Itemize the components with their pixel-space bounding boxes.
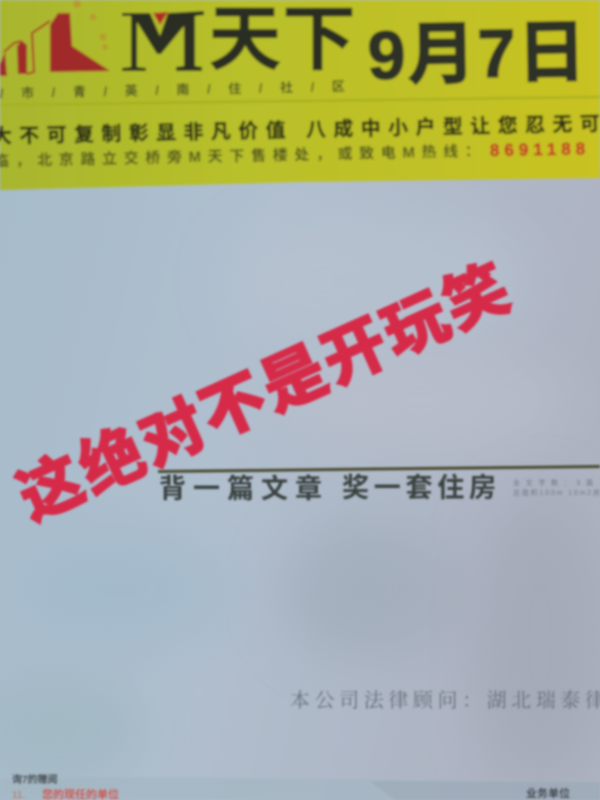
logo text: 天下 <box>208 0 356 80</box>
divider in header <box>0 97 600 105</box>
lower sheet right text: 业务单位 <box>526 786 570 800</box>
logo letter M <box>122 11 204 71</box>
legal adviser text: 本公司法律顾问：湖北瑞泰律 <box>290 689 600 712</box>
panel: yellow header band <box>0 0 600 190</box>
small print <box>513 478 600 497</box>
rule line <box>158 465 600 473</box>
headline: red slanted text: 这绝对不是开玩笑 <box>7 251 520 534</box>
phone number: 8691188 <box>490 139 590 160</box>
small print: 全文字数：3篇 <box>513 478 593 487</box>
slogan line: 大不可复制彰显非凡价值 八成中小户型让您忍无可 <box>0 111 600 148</box>
panel: lower sheet peeking out <box>0 773 600 800</box>
subheading <box>159 473 496 504</box>
subheading: 奖一套住房 <box>342 473 496 503</box>
icon: red building logo <box>0 13 110 76</box>
contact line: 临，北京路立交桥旁M天下售楼处，或致电M热线： <box>0 142 480 170</box>
lower sheet text: 询7的赠阅 <box>12 773 58 786</box>
icon: red triangle in logo <box>153 12 168 25</box>
subheading: 背一篇文章 <box>159 474 322 504</box>
panel: white paper sheet <box>0 170 600 800</box>
small print: 总面积100m 10m2房 <box>513 488 600 497</box>
tagline row: / 市 / 青 / 英 / 南 / 住 / 社 / 区 <box>0 79 345 101</box>
logo wordmark <box>122 0 356 80</box>
date: 9月7日 <box>367 14 586 94</box>
icon: logo dots <box>73 0 108 50</box>
